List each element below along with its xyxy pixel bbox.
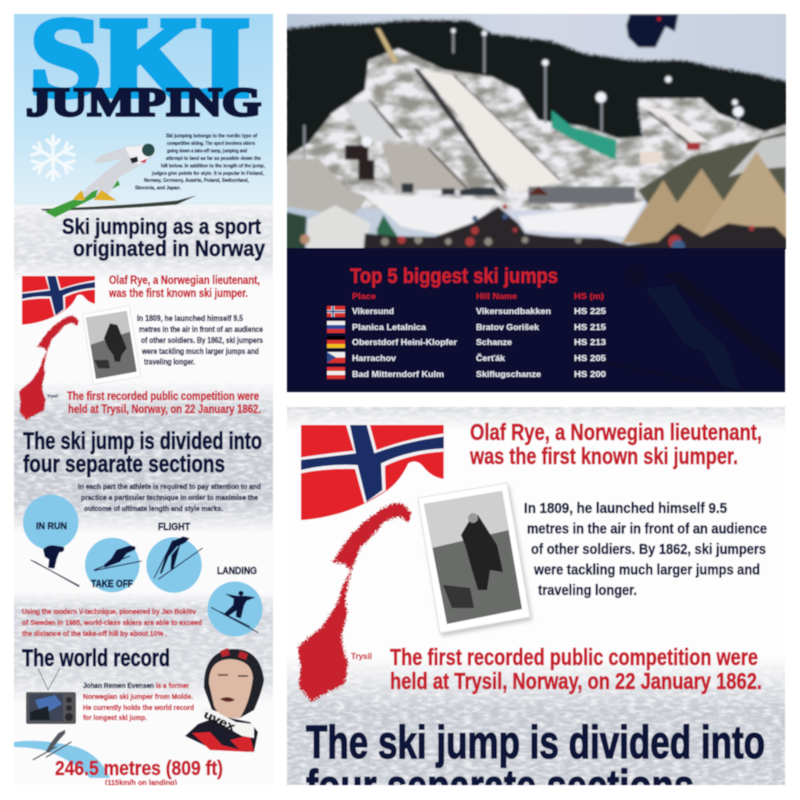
text block: intro: Slovenia, and Japan. [135,186,181,192]
flag: Norway [327,306,345,317]
title: JUMPING: JUMPING [26,80,261,124]
diagram: jump sections [23,495,262,636]
section: in run: IN RUN [36,521,67,532]
snowy hillside [285,43,788,213]
table row: Oberstdorf [327,336,606,348]
photo: Olaf Rye portrait [418,483,532,636]
text block: sections intro: outcome of ultimate length and style marks. [84,504,223,513]
text block: V-technique: the distance of the take-off hill by about 10% . [22,629,167,638]
table row: Oberstdorf: Schanze [476,337,512,347]
heading: four sections: four separate sections [23,451,225,478]
small slope [640,107,709,143]
callout: Olaf Rye: Olaf Rye, a Norwegian lieutenant, [109,273,260,287]
table row: Vikersund: Vikersund [352,306,394,316]
text block: intro: judges give points for style. It is popular in Finland, [151,171,264,177]
text block: 1809: metres in the air in front of an audience [527,520,767,538]
table row: Planica: Bratov Gorišek [476,322,539,332]
snow patch on mound [728,135,788,177]
text block: intro: going down a take-off ramp, jumping and [167,148,247,154]
map: Norway [19,316,79,420]
text block: Evensen: He currently holds the world record [83,703,194,712]
section: flight [146,522,203,593]
text block: 1809: In 1809, he launched himself 9.5 [137,314,243,323]
table row: Planica [327,321,606,333]
icon: snowflake [32,136,74,180]
heading: four sections [23,428,262,478]
section: landing [208,566,262,636]
table row: Harrachov: HS 205 [574,353,606,363]
label: Trysil: Trysil [47,394,58,398]
callout: first competition: The first recorded public competition were [67,389,259,403]
photo: Johan Remen Evensen: uvex [202,709,238,734]
icon: television [26,668,76,724]
heading: origin: Ski jumping as a sport [62,214,262,239]
table: header: Place [352,291,376,301]
green net [552,110,617,160]
snow foreground [287,158,645,237]
text block: 1809: traveling longer. [144,358,195,366]
section: take off: TAKE OFF [91,579,133,590]
photo: Olaf Rye portrait [83,306,141,384]
section: in run [23,495,79,587]
heading: world record: The world record [22,645,170,672]
table row: Oberstdorf: HS 213 [574,337,606,347]
forest [285,20,788,163]
table row: Bad Mitterndorf [327,367,606,379]
table row: Harrachov [327,352,606,363]
table row: Planica: HS 215 [574,322,606,332]
panel: ski jump hill photo [285,10,800,253]
white tent [285,205,400,252]
table row: Vikersund [327,306,606,317]
table: header: Hill Name [476,291,517,301]
navy background [287,248,785,392]
text block: Evensen: Johan Remen Evensen is a former [83,681,189,690]
text block: 1809: traveling longer. [538,582,637,599]
callout: first competition [390,644,762,694]
judges tower [345,145,374,180]
text block: intro: competitive skiing. The sport involves skiers [167,141,255,147]
text block: V-technique [22,607,202,638]
text block: 1809: were tackling much larger jumps and [141,347,259,356]
text block: Evensen [83,681,194,722]
text block: sections intro: practice a particular technique in order to maximise the [81,493,258,502]
callout: first competition: held at Trysil, Norway, on 22 January 1862. [68,402,261,416]
flag: Austria [327,367,345,379]
callout: Olaf Rye [108,273,260,300]
heading: four sections [306,716,765,800]
icon: skier silhouette [33,730,72,760]
text block: 1809: metres in the air in front of an audience [139,325,263,334]
table row: Vikersund: Vikersundbakken [476,306,551,316]
callout: Olaf Rye: was the first known ski jumper. [469,443,738,469]
text block: intro: Norway, Germany, Austria, Poland, Switzerland, [144,178,249,184]
main landing slope [413,68,560,193]
floodlights [304,28,744,183]
text block: intro [135,134,265,192]
sky [285,10,788,252]
callout: Olaf Rye [469,419,762,469]
callout: first competition [67,389,261,416]
panel: top 5 biggest ski jumps [287,248,786,392]
table: header [352,291,604,301]
icon: Norwegian flag [301,425,444,520]
text block: 1809 [524,500,767,599]
callout: Olaf Rye: was the first known ski jumper. [108,286,248,300]
table row: Harrachov: Harrachov [352,353,396,363]
text block: intro: hill below. In addition to the length of the jump, [161,164,265,170]
section: take off [85,538,142,592]
heading: origin [62,214,266,261]
table: header: HS (m) [574,291,604,301]
snow background [287,407,785,785]
text block: 1809: In 1809, he launched himself 9.5 [524,500,727,517]
photo contents [285,10,800,253]
text block: 1809: of other soldiers. By 1862, ski jumpers [531,541,766,558]
text block: V-technique: Using the modern V-technique, pioneered by Jan Boklöv [22,607,197,616]
text block: 1809: of other soldiers. By 1862, ski jumpers [141,336,263,345]
table row: Vikersund: HS 225 [574,306,606,316]
text block: 1809 [137,314,263,366]
crowd [300,204,788,253]
table row: Bad Mitterndorf: HS 200 [574,369,606,379]
in-run tower [375,28,398,63]
parked cars [402,183,500,196]
sky background [14,14,273,214]
table row: Bad Mitterndorf: Bad Mitterndorf Kulm [352,369,444,379]
tipi tents [622,152,800,243]
snow background [14,200,273,785]
photo: Johan Remen Evensen [185,648,264,752]
flag: Slovenia [327,321,345,333]
map: Norway [298,503,412,702]
text block: sections intro: In each part the athlete is required to pay attention to and [78,482,261,491]
heading: origin: originated in Norway [73,236,266,261]
statistic: landing speed: (115km/h on landing) [105,778,178,787]
text block: 1809: were tackling much larger jumps and [533,562,760,578]
faded skier silhouette [602,264,786,392]
text block: sections intro [78,482,261,513]
text block: Evensen: Norwegian ski jumper from Molde. [83,692,193,701]
heading: Top 5 biggest ski jumps [350,265,558,288]
timing building [528,143,700,203]
text block: Evensen: for longest ski jump. [83,713,147,722]
table row: Oberstdorf: Oberstdorf Heini-Klopfer [352,337,458,347]
green mound [638,132,786,210]
decoration: blue hill curve [14,741,110,778]
lower flat ground [343,100,472,190]
heading: four sections: The ski jump is divided into [23,428,262,455]
section: flight: FLIGHT [158,522,190,533]
table row: Bad Mitterndorf: Skiflugschanze [476,369,541,379]
text block: V-technique: of Sweden in 1985, world-class skiers are able to exceed [22,618,202,627]
panel: enlarged detail [287,407,785,800]
table row: Planica: Planica Letalnica [352,322,426,332]
Norway silhouette [626,14,678,47]
icon: Norwegian flag [22,276,95,325]
text block: intro: attempt to land as far as possible down the [166,156,261,162]
table row: Harrachov: Čerťák [476,352,505,363]
statistic: world record distance: 246.5 metres (809 ft) [55,758,223,780]
section: landing: LANDING [217,566,257,577]
photo: ski jumper [41,144,197,217]
flag: Czech Republic [327,352,345,363]
label: Trysil: Trysil [351,651,372,661]
flag: Germany [327,336,345,348]
text block: intro: Ski jumping belongs to the nordic type of [166,134,257,140]
panel: left infographic column [14,0,273,787]
